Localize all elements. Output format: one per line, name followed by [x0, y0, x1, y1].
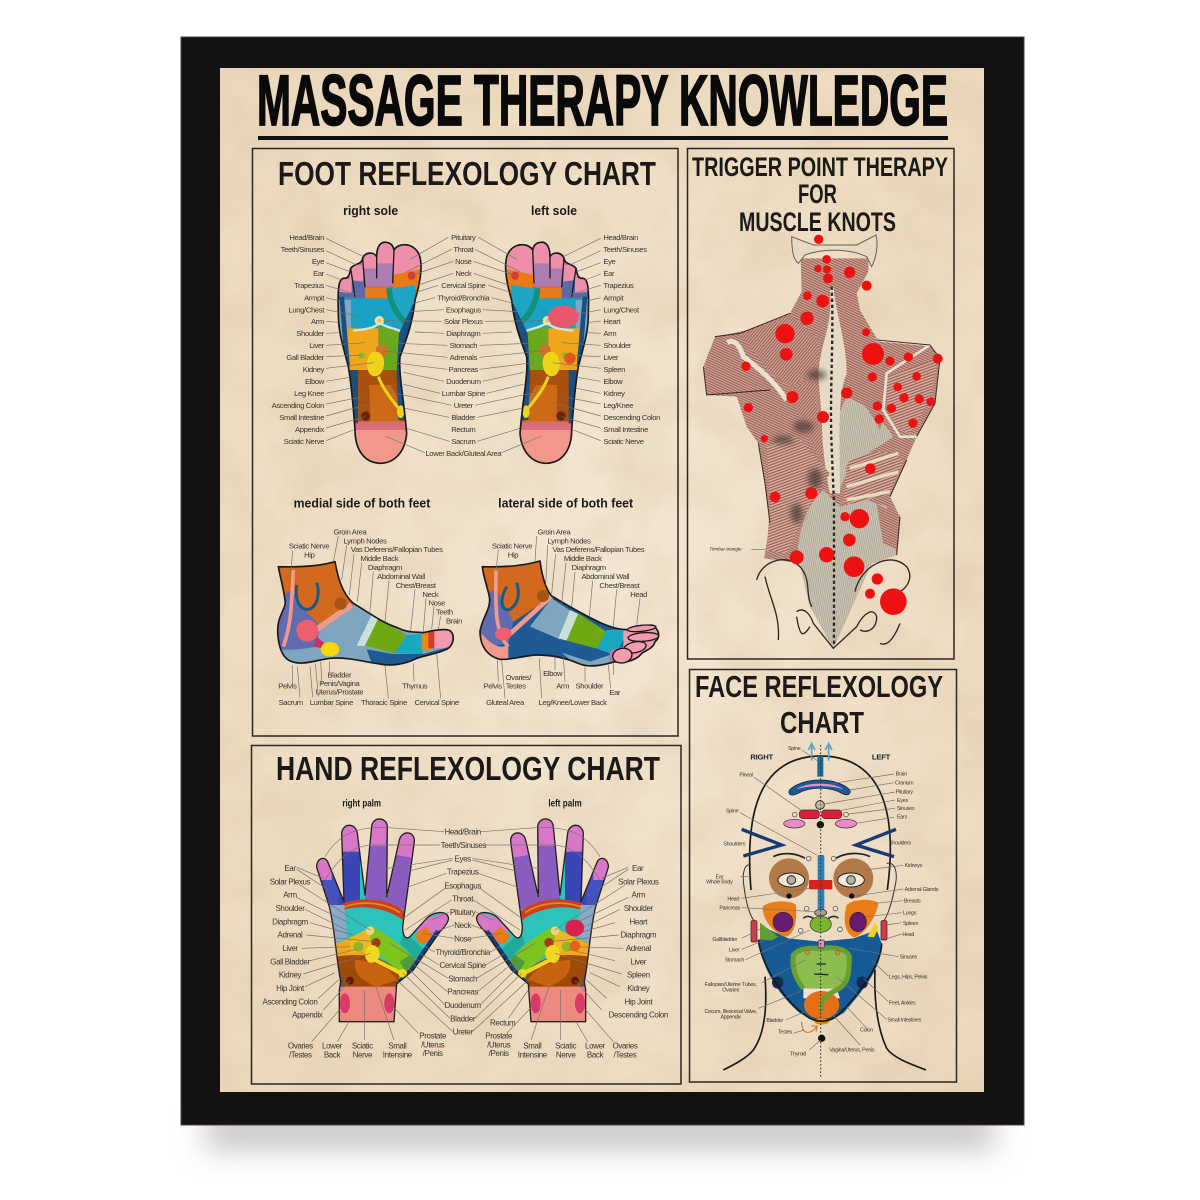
face right labels: Sinuses	[897, 806, 915, 812]
center labels: Adrenals	[450, 353, 478, 362]
left sole right labels: Leg/Knee	[603, 401, 633, 410]
left sole right labels: Sciatic Nerve	[603, 437, 644, 446]
center labels: Lower Back/Gluteal Area	[425, 449, 502, 458]
center labels: Solar Plexus	[444, 317, 483, 326]
medial labels: Sacrum	[279, 698, 303, 707]
face right labels: Colon	[860, 1027, 873, 1033]
right sole left labels: Leg Knee	[294, 389, 324, 398]
lower back fascia	[797, 490, 897, 648]
right sole left labels	[272, 233, 325, 446]
right shoulder blade muscles	[885, 358, 938, 433]
lower face blue zones	[758, 930, 882, 1023]
center dashed axis	[819, 745, 822, 1077]
right palm side labels: Ovaries	[288, 1042, 313, 1051]
heading: face reflexology: FACE REFLEXOLOGY	[695, 669, 943, 704]
medial foot map	[275, 558, 458, 668]
lateral labels: Pelvis	[484, 682, 502, 691]
right palm side labels: Ascending Colon	[263, 997, 317, 1006]
face left labels: Cecum, Illeocecal Valve,	[704, 1009, 757, 1015]
heading: foot reflexology: FOOT REFLEXOLOGY CHART	[278, 155, 656, 192]
left palm side labels: Sciatic	[555, 1042, 577, 1051]
center labels: Cervical Spine	[441, 281, 486, 290]
face right labels: Sinuses	[900, 955, 918, 961]
face right labels: Head	[902, 932, 914, 938]
right sole left labels: Small Intestine	[279, 413, 324, 422]
left sole right labels: Heart	[603, 317, 621, 326]
nose spine and adrenal	[798, 855, 842, 933]
right palm side labels: /Testes	[289, 1050, 312, 1059]
hand center labels: Esophagus	[444, 881, 481, 890]
right sole left labels: Gall Bladder	[286, 353, 325, 362]
hand center labels: Stomach	[448, 974, 477, 983]
right palm side labels: /Penis	[423, 1049, 443, 1058]
right sole left labels: Shoulder	[296, 329, 325, 338]
lateral labels: Shoulder	[575, 682, 604, 691]
hand center labels: Pituitary	[450, 908, 476, 917]
medial labels: Bladder	[327, 670, 352, 679]
trapezius and latissimus	[740, 313, 818, 387]
face map	[704, 743, 939, 1077]
medial labels: Middle Back	[360, 554, 399, 563]
left palm side labels: Rectum	[490, 1018, 516, 1027]
medial labels: Nose	[428, 599, 445, 608]
hand center labels: Nose	[454, 934, 472, 943]
center labels	[425, 233, 502, 458]
triangle annotation	[709, 547, 765, 552]
medial labels: Cervical Spine	[415, 698, 459, 707]
medial labels: Brain	[446, 617, 462, 626]
face right labels: LEFT	[872, 752, 891, 761]
lateral labels: Lymph Nodes	[548, 536, 591, 545]
face left labels: Appendix	[720, 1014, 741, 1020]
face left labels: Pancreas	[719, 906, 741, 912]
face left labels: Stomach	[725, 957, 744, 963]
hand charts	[263, 799, 668, 1059]
medial labels: Sciatic Nerve	[289, 542, 329, 551]
dark muscle shading	[773, 370, 826, 523]
left palm side labels: Kidney	[627, 984, 650, 993]
right palm side labels: Hip Joint	[276, 984, 305, 993]
face right labels: Eyes	[897, 798, 908, 804]
medial labels: Abdominal Wall	[377, 572, 426, 581]
left palm side labels: /Uterus	[487, 1040, 511, 1049]
face right labels: Feet, Ankles	[889, 1000, 916, 1006]
skull base	[792, 235, 877, 267]
right palm side labels: Small	[388, 1042, 407, 1051]
panel: trigger point therapy	[688, 148, 954, 659]
left palm side labels: Liver	[631, 957, 647, 966]
right palm side labels: Arm	[283, 891, 297, 900]
right sole left labels: Armpit	[304, 293, 325, 302]
left sole right labels: Head/Brain	[603, 233, 638, 242]
right sole left labels: Arm	[311, 317, 324, 326]
left sole right labels: Teeth/Sinuses	[603, 245, 647, 254]
face right labels	[829, 752, 939, 1054]
face left labels: Spine	[726, 808, 739, 814]
left sole right labels: Small Intestine	[603, 425, 648, 434]
medial labels: Diaphragm	[368, 563, 402, 572]
medial labels: Hip	[304, 551, 315, 560]
shoulder marks	[742, 829, 896, 857]
trigger point markers	[741, 235, 943, 615]
medial labels: Neck	[422, 590, 439, 599]
right palm side labels: Appendix	[292, 1011, 323, 1020]
heading: face reflexology	[695, 669, 943, 740]
pelvis outline	[757, 560, 910, 648]
gallbladder and spleen patches	[760, 923, 778, 941]
lateral labels	[484, 527, 647, 707]
left palm side labels: /Penis	[489, 1049, 509, 1058]
title rule	[258, 136, 948, 140]
right palm side labels: Kidney	[279, 971, 301, 980]
medial labels: Uterus/Prostate	[315, 688, 363, 697]
face right labels: Ears	[897, 815, 908, 821]
scapula outlines	[727, 341, 787, 400]
face right labels: Kidneys	[905, 863, 923, 869]
medial labels: Lymph Nodes	[344, 536, 387, 545]
center labels: Ureter	[454, 401, 474, 410]
center labels: Thyroid/Bronchia	[437, 293, 490, 302]
left palm side labels: Shoulder	[624, 904, 654, 913]
triangle annotation: Trimbar triangle	[709, 547, 742, 552]
center labels: Rectum	[451, 425, 475, 434]
face left labels: Ear	[716, 874, 724, 880]
left palm side labels	[485, 864, 668, 1059]
ears	[743, 863, 896, 922]
hand center labels: Cervical Spine	[439, 961, 487, 970]
face left labels: Pineal	[739, 773, 753, 779]
left sole right labels: Shoulder	[603, 341, 632, 350]
center labels: Duodenum	[446, 377, 481, 386]
left sole right labels: Armpit	[603, 293, 624, 302]
right palm side labels: Diaphragm	[272, 917, 309, 926]
right palm side labels: Intensine	[383, 1050, 413, 1059]
black picture frame	[181, 37, 1024, 1125]
frame shadow	[205, 1112, 995, 1150]
right palm side labels: Ear	[284, 864, 296, 873]
right palm side labels	[263, 864, 447, 1059]
foot soles chart	[272, 204, 660, 467]
center labels: Esophagus	[446, 305, 481, 314]
lateral labels: Gluteal Area	[486, 698, 525, 707]
center labels: Pituitary	[451, 233, 476, 242]
right sole left labels: Appendix	[295, 425, 325, 434]
face right labels: Breasts	[904, 899, 921, 905]
face left labels: Thyroid	[790, 1051, 806, 1057]
lateral labels: Vas Deferens/Fallopian Tubes	[552, 545, 645, 554]
left palm side labels: Intensine	[518, 1050, 548, 1059]
lateral labels: Middle Back	[564, 554, 602, 563]
hand center labels: Eyes	[455, 855, 471, 864]
left palm side labels: /Testes	[614, 1050, 637, 1059]
face left labels	[704, 746, 806, 1057]
right palm side labels: Solar Plexus	[270, 877, 311, 886]
right sole left labels: Eye	[312, 257, 324, 266]
heading: hand reflexology: HAND REFLEXOLOGY CHART	[276, 750, 660, 787]
center labels: Nose	[455, 257, 472, 266]
right palm side labels: /Uterus	[421, 1040, 445, 1049]
left sole right labels: Arm	[603, 329, 616, 338]
center labels: Lumbar Spine	[442, 389, 485, 398]
medial labels: Thymus	[402, 682, 428, 691]
rib bands	[847, 453, 898, 500]
center labels: Bladder	[451, 413, 476, 422]
heading: trigger point therapy: TRIGGER POINT THERAPY	[692, 152, 948, 182]
right palm side labels: Adrenal	[278, 931, 303, 940]
left palm side labels: Ovaries	[613, 1042, 638, 1051]
heading: trigger point therapy: MUSCLE KNOTS	[739, 207, 896, 237]
right sole left labels: Head/Brain	[289, 233, 324, 242]
label: right palm: right palm	[342, 799, 381, 810]
hand center labels: Trapezius	[447, 868, 479, 877]
right palm side labels: Shoulder	[275, 904, 305, 913]
hand center labels: Thyroid/Bronchia	[435, 948, 491, 957]
panel: face reflexology chart	[690, 669, 956, 1082]
left palm side labels: Arm	[632, 891, 646, 900]
upper spine band	[818, 287, 847, 493]
label: medial side: medial side of both feet	[294, 496, 431, 510]
left palm map	[471, 817, 628, 1042]
lateral labels: Chest/Breast	[599, 581, 640, 590]
hand center labels: Ureter	[453, 1028, 473, 1037]
face left labels: Bladder	[766, 1018, 784, 1024]
spine	[831, 287, 834, 647]
panel: foot reflexology chart	[252, 148, 678, 736]
medial labels	[278, 527, 462, 707]
lateral labels: Ovaries/	[506, 673, 532, 682]
right sole left labels: Trapezius	[294, 281, 325, 290]
medial labels: Pelvis	[278, 682, 297, 691]
left sole right labels: Kidney	[603, 389, 625, 398]
lateral foot map	[477, 558, 663, 668]
lateral labels: Sciatic Nerve	[492, 542, 532, 551]
poster background	[220, 68, 984, 1092]
lateral labels: Head	[630, 590, 647, 599]
center labels: Diaphragm	[446, 329, 480, 338]
label: lateral side: lateral side of both feet	[498, 496, 634, 510]
left palm side labels: Descending Colon	[609, 1011, 668, 1020]
face right labels: Cranium	[895, 781, 914, 787]
face left labels: Ovaries	[722, 987, 740, 993]
right sole left labels: Kidney	[303, 365, 325, 374]
panel: hand reflexology chart	[252, 746, 681, 1084]
muscle back anatomy illustration	[703, 235, 943, 648]
hand center labels: Pancreas	[447, 988, 478, 997]
face right labels: Adrenal Glands	[905, 887, 939, 893]
eyes and kidneys	[769, 853, 873, 899]
side view leader lines	[291, 536, 640, 698]
face left labels: Spine	[788, 746, 801, 752]
hand center labels: Teeth/Sinuses	[441, 841, 486, 850]
label: left sole: left sole	[531, 204, 577, 218]
left sole right labels: Lung/Chest	[603, 305, 640, 314]
lateral foot toes	[612, 624, 659, 665]
face left labels: Whole Body	[706, 880, 733, 886]
face right labels: Brain	[896, 771, 907, 777]
center labels: Stomach	[450, 341, 477, 350]
left sole right labels: Elbow	[603, 377, 623, 386]
right palm side labels: Gall Bladder	[270, 957, 310, 966]
left palm side labels: Hip Joint	[624, 997, 653, 1006]
right sole left labels: Elbow	[305, 377, 325, 386]
left palm side labels: Ear	[632, 864, 644, 873]
label: right sole: right sole	[343, 204, 398, 218]
hand center labels: Throat	[452, 894, 474, 903]
hand center labels: Neck	[454, 921, 471, 930]
medial labels: Chest/Breast	[396, 581, 437, 590]
face left labels: Fallopian/Uterine Tubes,	[705, 982, 757, 988]
face left labels: Shoulders	[723, 841, 746, 847]
center labels: Neck	[455, 269, 472, 278]
lateral labels: Abdominal Wall	[581, 572, 630, 581]
center labels: Sacrum	[451, 437, 475, 446]
left sole right labels: Trapezius	[603, 281, 634, 290]
right palm side labels: Sciatic	[352, 1042, 373, 1051]
medial labels: Lumbar Spine	[310, 698, 353, 707]
face right labels: Legs, Hips, Pelvis	[889, 975, 928, 981]
lateral labels: Hip	[508, 551, 518, 560]
left sole right labels: Spleen	[603, 365, 625, 374]
face left labels: RIGHT	[750, 752, 774, 761]
left palm side labels: Lower	[585, 1042, 606, 1051]
left sole right labels	[603, 233, 660, 446]
right sole left labels: Ascending Colon	[272, 401, 324, 410]
cheeks	[763, 900, 878, 937]
left palm side labels: Adrenal	[626, 944, 651, 953]
right sole left labels: Teeth/Sinuses	[281, 245, 325, 254]
face right labels: Spleen	[903, 921, 918, 927]
face left labels: Liver	[729, 947, 740, 953]
left sole right labels: Eye	[603, 257, 616, 266]
medial labels: Groin Area	[334, 527, 368, 536]
left palm side labels: Back	[587, 1050, 604, 1059]
hand center labels: Head/Brain	[445, 828, 481, 837]
right palm side labels: Nerve	[353, 1050, 373, 1059]
medial labels: Vas Deferens/Fallopian Tubes	[351, 545, 443, 554]
face left labels: Heart	[727, 896, 740, 902]
body silhouette	[703, 258, 940, 648]
mouth zone	[772, 940, 868, 1025]
face right labels: Shoulders	[889, 841, 911, 847]
right palm side labels: Lower	[322, 1042, 343, 1051]
testes arrow	[802, 1022, 817, 1032]
heading: face reflexology: CHART	[780, 705, 864, 740]
lateral labels: Leg/Knee/Lower Back	[539, 698, 607, 707]
right sole left labels: Liver	[309, 341, 325, 350]
left palm side labels: Heart	[629, 917, 648, 926]
left sole right labels: Ear	[603, 269, 615, 278]
right sole left labels: Lung/Chest	[288, 305, 325, 314]
left sole right labels: Descending Colon	[603, 413, 660, 422]
center labels: Throat	[453, 245, 475, 254]
left palm side labels: Spleen	[627, 971, 650, 980]
brain, cranium and forehead points	[784, 743, 857, 828]
lateral labels: Diaphragm	[572, 563, 606, 572]
mid back fascia	[832, 397, 893, 493]
medial labels: Teeth	[436, 608, 453, 617]
right sole left labels: Ear	[313, 269, 325, 278]
heading: trigger point therapy	[692, 152, 948, 237]
face left labels: Testes	[778, 1030, 793, 1036]
face right labels: Small Intestines	[887, 1017, 922, 1023]
left palm side labels: Small	[523, 1042, 542, 1051]
foot side views chart	[275, 496, 663, 707]
left palm side labels: Prostate	[485, 1032, 513, 1041]
lateral labels: Groin Area	[538, 527, 572, 536]
right palm side labels: Prostate	[419, 1032, 447, 1041]
head outline	[723, 756, 926, 1070]
lateral labels: Arm	[556, 682, 569, 691]
lateral labels: Elbow	[543, 669, 563, 678]
left sole right labels: Liver	[603, 353, 619, 362]
label: left palm: left palm	[548, 799, 582, 810]
face right labels: Pituitary	[896, 790, 913, 796]
left palm side labels: Solar Plexus	[618, 877, 659, 886]
right palm map	[297, 817, 454, 1042]
right sole left labels: Sciatic Nerve	[284, 437, 324, 446]
right palm side labels: Liver	[282, 944, 298, 953]
face right labels: Vagina/Uterus, Penis	[829, 1048, 875, 1054]
hand center labels: Bladder	[450, 1014, 476, 1023]
left palm side labels: Nerve	[556, 1050, 576, 1059]
face right labels: Lungs	[903, 910, 917, 916]
left palm side labels: Diaphragm	[620, 931, 657, 940]
heading: trigger point therapy: FOR	[798, 179, 837, 209]
hand center labels	[435, 828, 491, 1037]
face leader lines	[740, 750, 903, 1050]
hand center labels: Duodenum	[445, 1001, 481, 1010]
left sole foot map	[473, 237, 601, 467]
right palm side labels: Back	[324, 1050, 341, 1059]
lateral labels: Ear	[609, 688, 621, 697]
face left labels: Gallbladder	[712, 937, 737, 943]
medial labels: Thoracic Spine	[361, 698, 407, 707]
lateral labels: Testes	[506, 682, 526, 691]
right sole foot map	[326, 237, 453, 467]
center labels: Pancreas	[449, 365, 479, 374]
medial labels: Penis/Vagina	[319, 679, 361, 688]
